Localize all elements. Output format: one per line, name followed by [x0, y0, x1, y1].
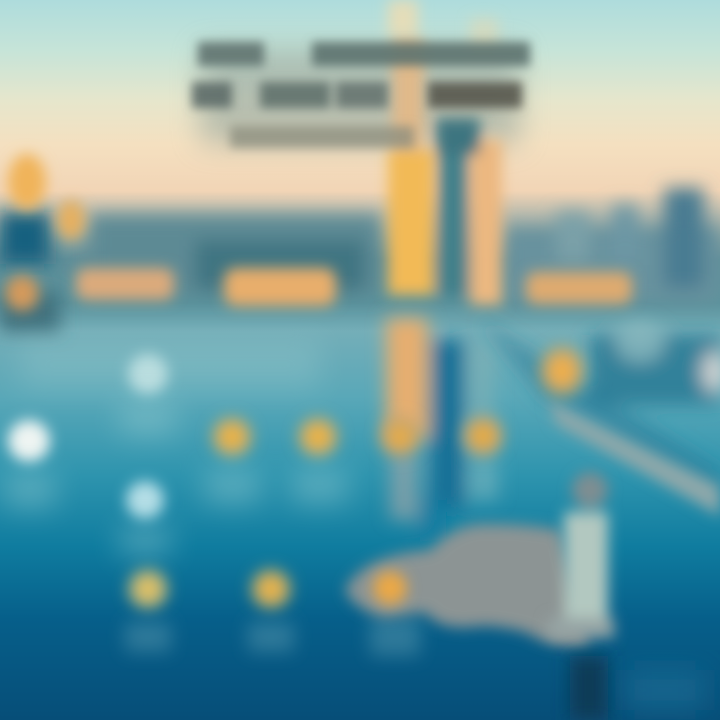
icons: second row gold markers — [126, 567, 293, 611]
diagonal pier — [480, 320, 720, 500]
left golden towers — [5, 154, 85, 311]
caption blocks: second row — [125, 618, 420, 656]
tower reflection — [386, 318, 498, 540]
pier deck — [548, 400, 720, 516]
title block (illegible dark text bars) — [192, 42, 530, 148]
soft water glow — [20, 340, 320, 390]
icon: large gold marker on pier — [538, 344, 586, 398]
icons: white glowing markers — [8, 354, 168, 519]
gray cloud panel — [345, 524, 590, 646]
caption blocks: first row — [5, 400, 347, 556]
icons: first row gold markers — [210, 414, 505, 459]
icon: gold marker on cloud — [373, 571, 407, 605]
title backdrop tint — [200, 48, 520, 144]
lighthouse reflection — [570, 656, 608, 720]
skyline: distant city band — [0, 188, 720, 332]
lower right water highlight — [625, 670, 705, 710]
central tower — [388, 0, 502, 305]
glowing waterfront buildings — [76, 268, 632, 306]
lighthouse tower — [548, 472, 614, 638]
